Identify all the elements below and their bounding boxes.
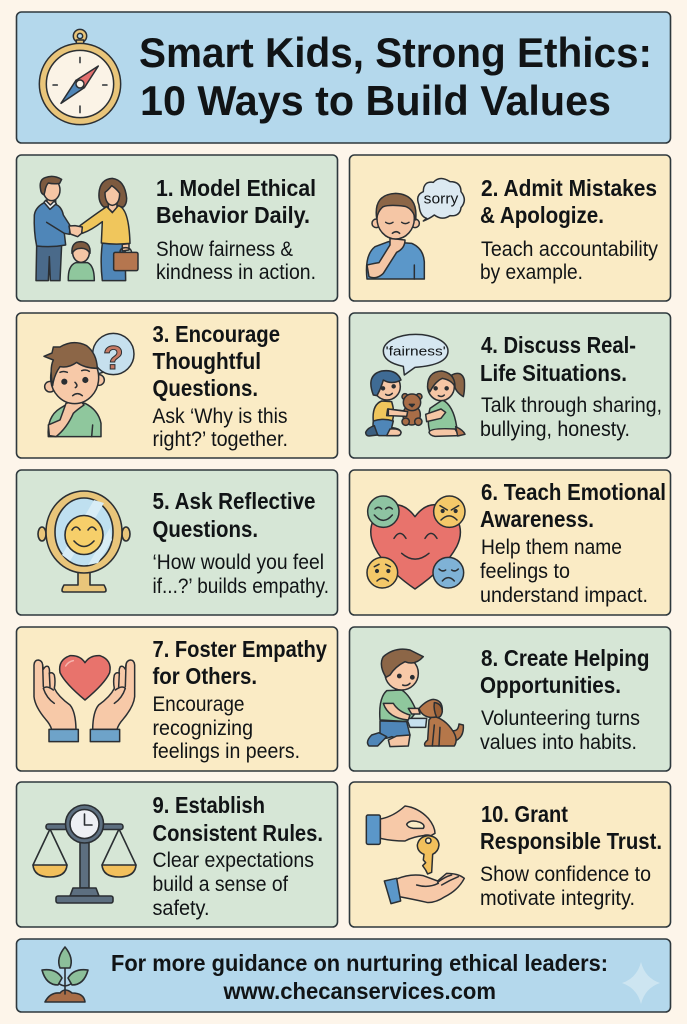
heading [156,175,316,228]
heading: Opportunities. [480,672,621,698]
text block [152,849,314,920]
text block: Ask ‘Why is this [152,405,288,428]
heading [480,479,666,532]
text block: motivate integrity. [480,887,635,910]
text block: right?’ together. [152,428,288,451]
call to action text: www.checanservices.com [223,978,496,1004]
icon: hands holding heart [34,656,135,742]
text block [480,394,662,441]
text block: Clear expectations [152,849,314,872]
text block: by example. [480,261,583,284]
panel: card 7 [16,627,338,771]
text block: kindness in action. [156,261,316,284]
heading: Life Situations. [480,360,627,386]
panel: card 8 [350,627,670,771]
heading [152,488,316,542]
heading [152,636,327,689]
text block: if...?’ builds empathy. [152,575,329,598]
icon: adults shaking hands with child [34,176,138,281]
text block: feelings to [480,560,570,583]
heading: 3. Encourage [152,321,280,347]
heading: 8. Create Helping [481,645,650,671]
panel: footer [16,939,670,1012]
icon: boy feeding puppy [367,649,463,747]
icon: children sharing teddy bear: 'fairness' [386,344,446,359]
icon: hand passing key to hand [366,806,464,904]
icon: heart with emotion faces [367,496,465,589]
text block: Volunteering turns [481,707,640,730]
icon: balance scale with clock [33,805,136,903]
heading: Behavior Daily. [156,202,310,228]
text block: understand impact. [480,584,648,607]
heading: 10. Grant [481,801,568,827]
heading: Questions. [152,375,258,401]
heading [480,801,662,854]
heading: 9. Establish [152,792,265,818]
call to action text [111,950,608,1004]
panel: card 6 [350,470,670,615]
heading [480,645,650,698]
text block [152,551,329,598]
title: 10 Ways to Build Values [140,77,611,124]
heading [480,175,657,228]
text block [152,405,288,451]
heading: 2. Admit Mistakes [481,175,657,201]
icon: thinking boy with question mark: ? [103,340,124,377]
icon: boy saying sorry [366,178,464,279]
text block: build a sense of [152,873,288,896]
text block: feelings in peers. [152,740,300,763]
heading: Awareness. [480,506,594,532]
text block: recognizing [152,717,253,740]
title [139,29,652,124]
text block: Talk through sharing, [481,394,662,417]
text block [480,238,658,284]
heading [152,792,323,846]
title: Smart Kids, Strong Ethics: [139,29,652,76]
panel: card 1 [16,155,338,301]
text block: Help them name [481,536,622,559]
text block [480,536,648,607]
icon: mirror with smiling face [38,491,130,592]
decorative sparkle [622,962,660,1004]
icon: thinking boy with question mark [44,333,134,437]
heading: 1. Model Ethical [156,175,316,201]
text block: Show fairness & [156,238,293,261]
text block: Show confidence to [480,863,651,886]
panel: header [16,12,670,143]
heading: Consistent Rules. [152,820,323,846]
panel: card 4 [350,313,670,458]
heading: 6. Teach Emotional [481,479,666,505]
heading: Thoughtful [152,348,261,374]
text block [156,238,316,284]
icon: boy saying sorry: sorry [424,192,459,208]
text block: values into habits. [480,731,637,754]
heading [152,321,280,401]
text block [480,707,640,754]
text block [152,693,300,763]
panel: card 5 [16,470,338,615]
text block: bullying, honesty. [480,418,630,441]
heading: Responsible Trust. [480,828,662,854]
heading: 4. Discuss Real- [481,332,636,358]
panel: card 3 [16,313,338,458]
icon: children sharing teddy bear [366,334,465,436]
panel: card 9 [16,782,338,927]
heading: for Others. [152,663,257,689]
call to action text: For more guidance on nurturing ethical leaders: [111,950,608,976]
heading: 7. Foster Empathy [152,636,327,662]
text block [480,863,651,910]
heading [480,332,636,386]
panel: card 10 [350,782,670,927]
heading: Questions. [152,516,258,542]
text block: Encourage [152,693,244,716]
heading: 5. Ask Reflective [152,488,316,514]
icon: seedling [42,947,88,1002]
icon: compass [39,29,121,125]
text block: Teach accountability [481,238,658,261]
panel: card 2 [350,155,670,301]
text block: ‘How would you feel [152,551,324,574]
text block: safety. [152,897,210,920]
heading: & Apologize. [480,202,604,228]
